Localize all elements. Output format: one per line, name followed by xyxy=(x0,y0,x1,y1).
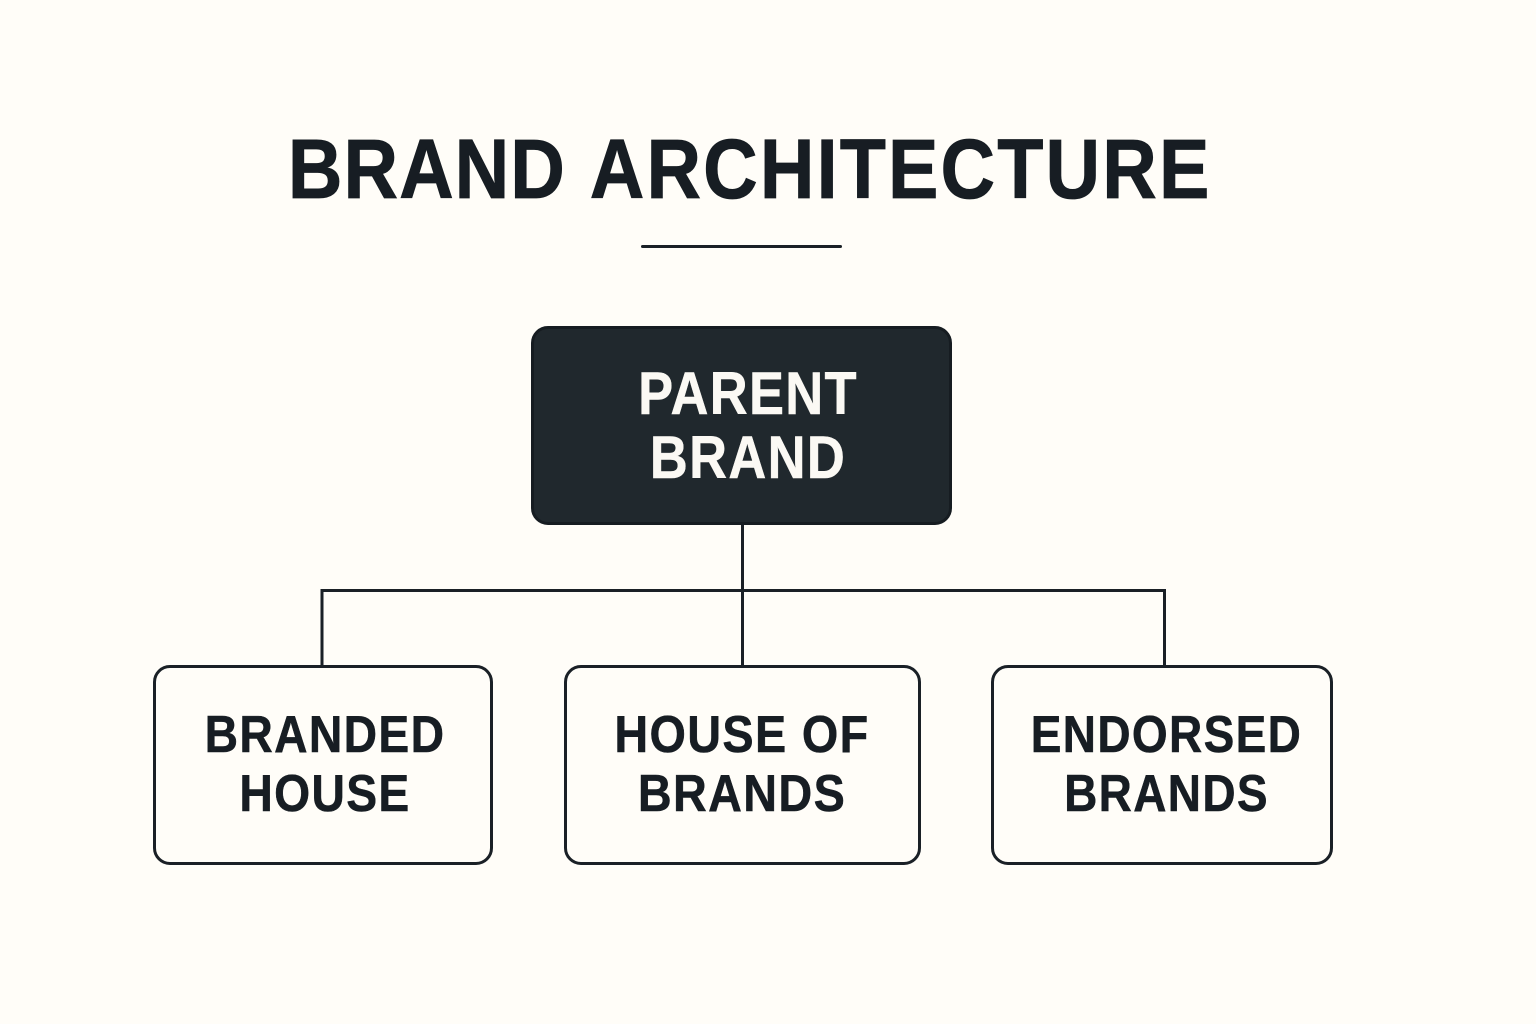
title underline xyxy=(641,245,842,248)
branded house label: HOUSE xyxy=(239,764,411,822)
branded house label xyxy=(205,706,445,822)
house of brands label: HOUSE OF xyxy=(614,706,870,764)
endorsed brands label: BRANDS xyxy=(1064,764,1269,822)
parent brand label xyxy=(638,360,858,491)
box: house of brands xyxy=(564,665,921,865)
title: BRAND ARCHITECTURE xyxy=(287,122,1211,216)
box: branded house xyxy=(153,665,493,865)
parent brand box xyxy=(531,326,952,525)
box: endorsed brands xyxy=(991,665,1333,865)
house of brands label xyxy=(614,706,870,822)
parent brand label: BRAND xyxy=(650,424,846,491)
parent brand label: PARENT xyxy=(638,360,858,427)
endorsed brands label: ENDORSED xyxy=(1031,706,1302,764)
branded house label: BRANDED xyxy=(205,706,445,764)
endorsed brands label xyxy=(1031,706,1302,822)
house of brands label: BRANDS xyxy=(638,764,846,822)
